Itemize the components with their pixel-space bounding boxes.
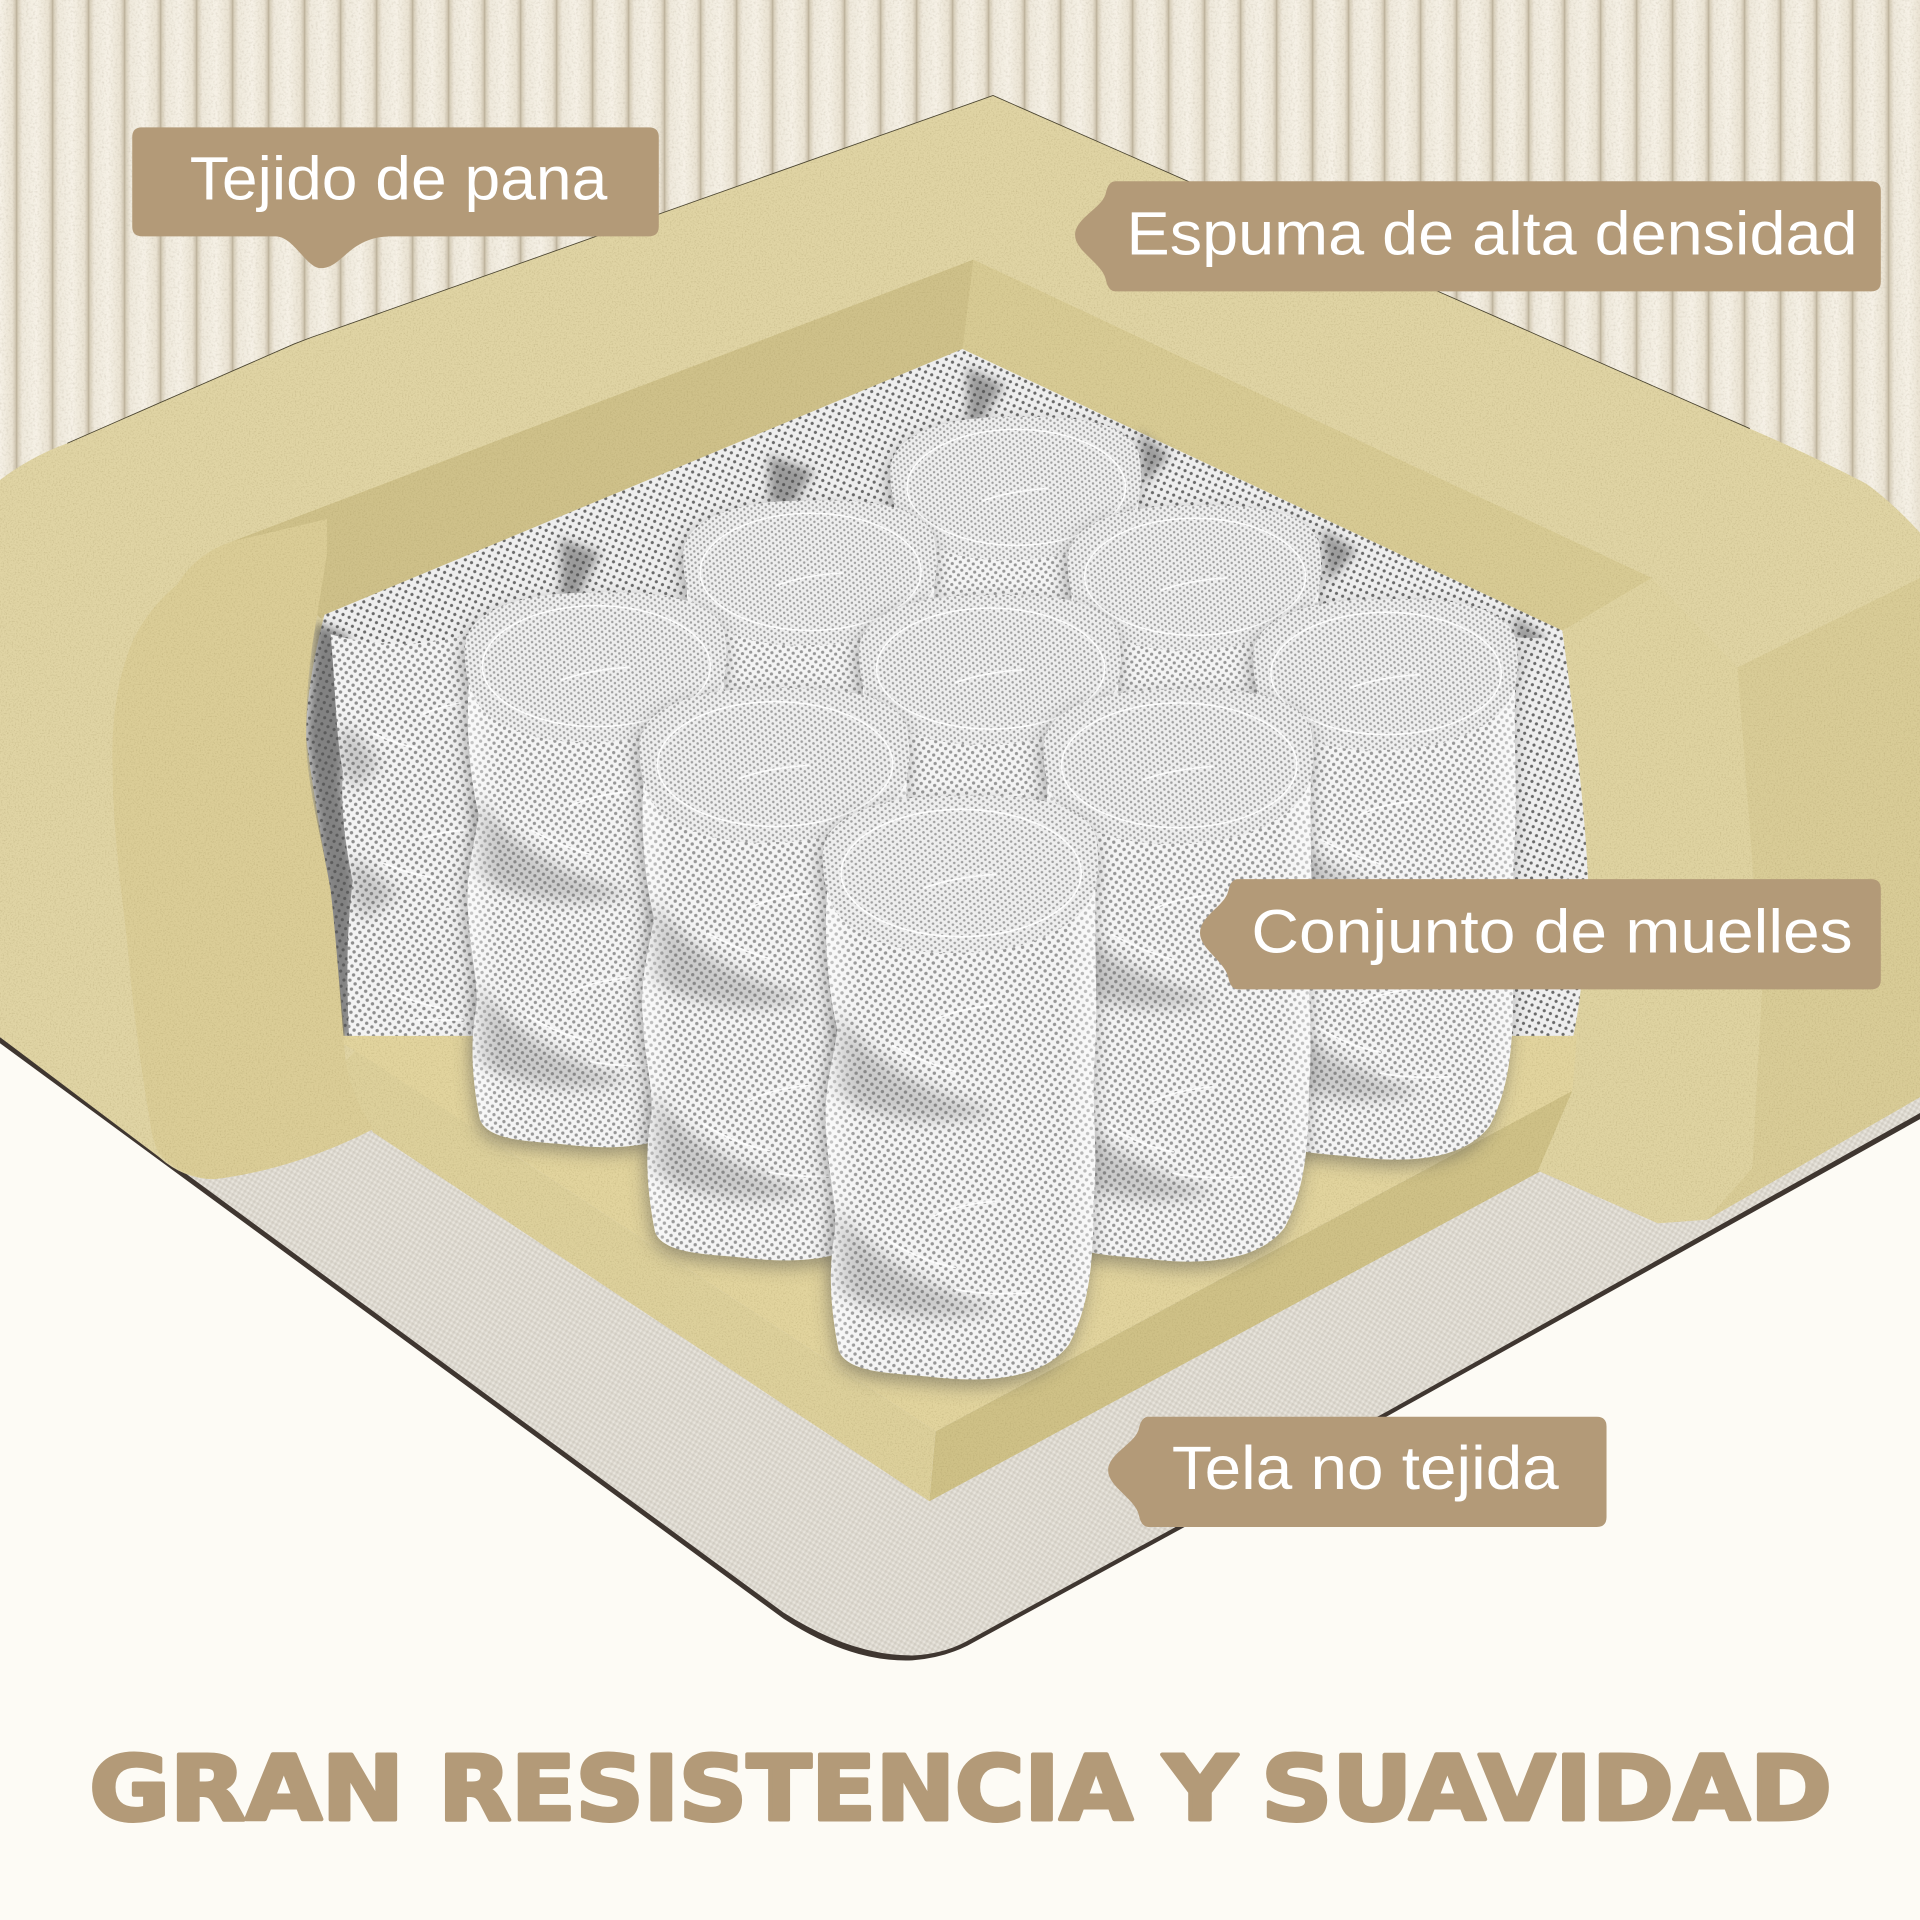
callout: Tejido de pana: [132, 127, 659, 268]
right side face: [1707, 578, 1920, 1220]
foam top edge outline: [67, 96, 1750, 443]
foam outer body: [0, 96, 1920, 1223]
non-woven fabric base layer: [0, 857, 1920, 1661]
title: GRAN: [89, 1738, 404, 1842]
foam cut faces: [112, 519, 1920, 1223]
pocket spring front right: [1044, 689, 1313, 1262]
callout: Tela no tejida: Tela no tejida: [1172, 1434, 1560, 1502]
foam base slab: [328, 1036, 1580, 1501]
slab left front face: [331, 1051, 936, 1501]
callout: Conjunto de muelles: [1200, 879, 1881, 989]
pocket spring front left: [640, 688, 909, 1260]
pocket spring back right: [1068, 505, 1321, 1043]
right back spring: [1500, 637, 1584, 1041]
title: Y: [1162, 1738, 1238, 1842]
slab right front face: [929, 1091, 1572, 1501]
callout: Conjunto de muelles: Conjunto de muelles: [1251, 898, 1853, 966]
left back spring: [306, 622, 484, 1040]
spring pocket cavity: [306, 349, 1588, 1041]
callout: Espuma de alta densidad: [1075, 181, 1881, 291]
pocket spring middle centre: [859, 595, 1121, 1150]
foam inner wall right: [962, 260, 1652, 631]
pocket spring front centre: [823, 795, 1098, 1379]
pocket spring middle left: [465, 592, 726, 1147]
right cut face: [1538, 578, 1762, 1223]
pocket spring back centre: [890, 417, 1141, 948]
title: RESISTENCIA: [438, 1738, 1133, 1842]
title: [89, 1738, 1832, 1842]
callout: Tela no tejida: [1108, 1417, 1607, 1527]
pocket spring back left: [683, 500, 937, 1038]
callout: Espuma de alta densidad: Espuma de alta densidad: [1127, 200, 1858, 268]
left cut face: [112, 519, 373, 1179]
title: SUAVIDAD: [1261, 1738, 1832, 1842]
foam inner wall left: [233, 260, 973, 618]
callout: Tejido de pana: Tejido de pana: [190, 145, 608, 213]
pocket spring middle right: [1253, 599, 1518, 1160]
shadow pits between back springs: [561, 367, 1545, 680]
corduroy fabric texture: [0, 0, 1920, 686]
